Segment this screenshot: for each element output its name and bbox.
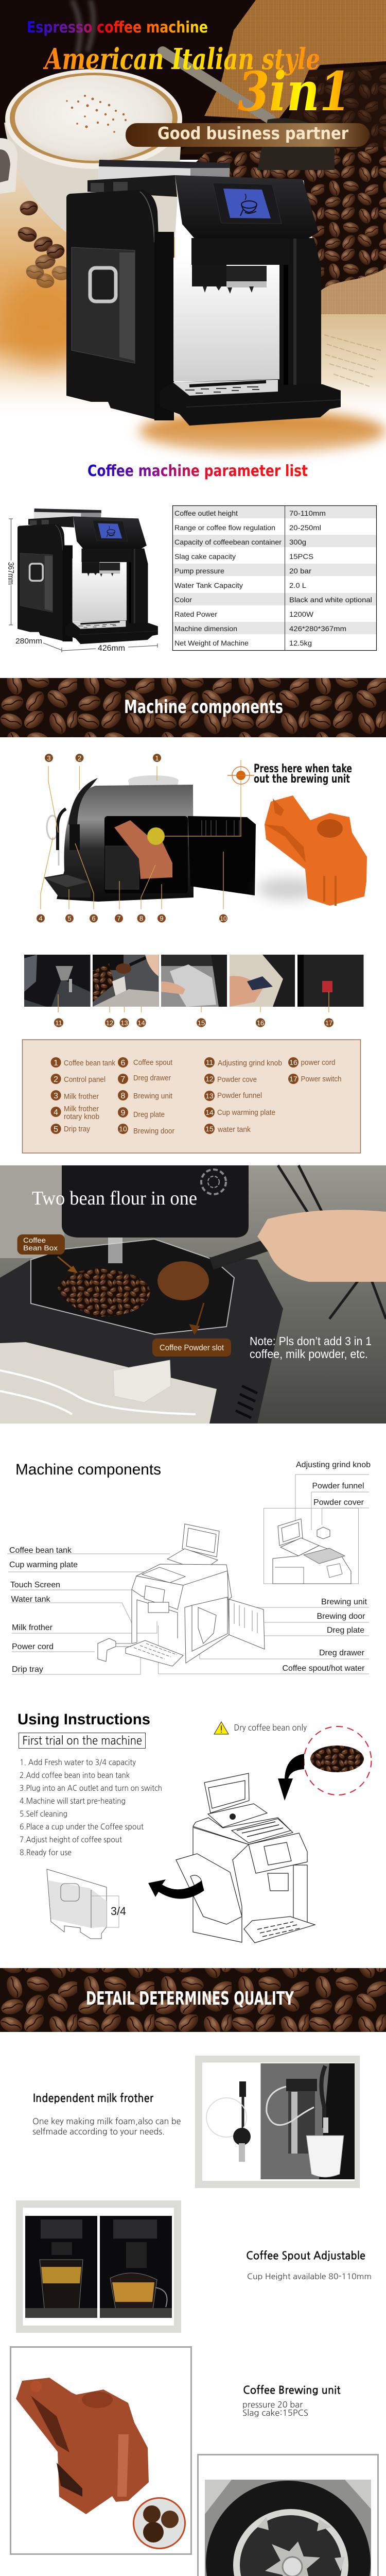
feature: independent milk frother: selfmade according to your needs. bbox=[32, 2128, 165, 2136]
note: press here bbox=[254, 762, 352, 786]
parameter table: Black and white optional bbox=[289, 596, 372, 604]
callout lines and labels: Water tank bbox=[11, 1595, 50, 1604]
legend column 4 bbox=[288, 1057, 342, 1084]
callout lines and labels: Powder cover bbox=[313, 1498, 364, 1507]
callout lines and labels: Dreg plate bbox=[327, 1626, 364, 1635]
callout lines and labels: Touch Screen bbox=[10, 1581, 60, 1589]
inset line drawing: powder funnel bbox=[264, 1509, 358, 1584]
component number badges: 14 bbox=[137, 1019, 145, 1027]
numbered leader lines bbox=[41, 766, 329, 1012]
callout lines and labels: Dreg drawer bbox=[319, 1649, 365, 1657]
legend column 3 bbox=[204, 1057, 282, 1134]
feature: coffee spout text bbox=[246, 2250, 372, 2281]
component number badges bbox=[37, 754, 334, 1027]
section: hero and parameter table bbox=[0, 0, 386, 653]
callout lines and labels: Drip tray bbox=[12, 1665, 43, 1674]
parameter table: Rated Power bbox=[174, 610, 217, 618]
legend column 2 bbox=[118, 1057, 174, 1136]
parameter table: 70-110mm bbox=[289, 509, 326, 517]
feature: independent milk frother: One key making milk foam,also can be bbox=[32, 2117, 181, 2126]
parameter table: Coffee outlet height bbox=[174, 509, 238, 517]
legend column 2: 7 bbox=[121, 1075, 126, 1084]
component number badges: 16 bbox=[257, 1019, 264, 1027]
parameter table bbox=[172, 505, 377, 651]
callout lines and labels: Milk frother bbox=[12, 1623, 53, 1632]
arrow: remove tank bbox=[148, 1879, 204, 1899]
instruction steps list: 6.Place a cup under the Coffee spout bbox=[20, 1823, 144, 1831]
feature: coffee brewing unit text: pressure 20 bar bbox=[242, 2401, 303, 2409]
instruction steps list: 4.Machine will start pre-heating bbox=[20, 1798, 126, 1805]
feature: independent milk frother bbox=[32, 2092, 181, 2136]
coffee machine bbox=[66, 160, 341, 426]
dimensions product image: 280mm bbox=[15, 637, 42, 646]
banner: detail determines quality bbox=[0, 1968, 386, 2032]
parameter table: 426*280*367mm bbox=[289, 624, 346, 633]
feature: coffee brewing unit text: Slag cake:15PCS bbox=[242, 2409, 308, 2417]
machine with brewing door open bbox=[44, 775, 256, 902]
callout lines and labels: Coffee bean tank bbox=[9, 1546, 72, 1555]
warning: dry coffee bean only bbox=[214, 1722, 307, 1734]
instruction steps list: 2.Add coffee bean into bean tank bbox=[20, 1772, 130, 1780]
arrow: powder slot bbox=[190, 1303, 204, 1333]
stainless warming plate bbox=[0, 1342, 217, 1423]
label: coffee powder slot bbox=[152, 1338, 231, 1357]
legend column 1: 1 bbox=[54, 1059, 58, 1067]
callout lines and labels: Powder funnel bbox=[312, 1482, 364, 1490]
label: coffee bean box bbox=[17, 1234, 65, 1255]
arrow: bean box bbox=[58, 1257, 76, 1272]
coffee beans heap bbox=[178, 147, 386, 291]
photo: water tank bbox=[161, 955, 227, 1007]
parameter table: 20 bar bbox=[289, 567, 311, 575]
parameter table: Color bbox=[174, 596, 192, 604]
dimensions product image bbox=[6, 509, 158, 653]
red dashed circle with beans bbox=[304, 1726, 372, 1795]
banner: machine components bbox=[0, 678, 386, 737]
legend column 2: 9 bbox=[121, 1109, 126, 1117]
heading: two bean flour in one: Two bean flour in one bbox=[32, 1188, 197, 1209]
beans on saucer bbox=[16, 199, 71, 290]
parameter table: Pump pressure bbox=[174, 567, 224, 575]
heading: machine components diagram: Machine components bbox=[15, 1461, 161, 1478]
banner: machine components: Machine components bbox=[124, 697, 283, 718]
banner: detail determines quality: DETAIL DETERMINES QUALITY bbox=[86, 1988, 294, 2009]
legend column 1: Drip tray bbox=[64, 1125, 90, 1133]
parameter table: Capacity of coffeebean container bbox=[174, 538, 282, 546]
component number badges: 13 bbox=[120, 1019, 128, 1027]
warning: dry coffee bean only: Dry coffee bean only bbox=[234, 1724, 307, 1732]
component number badges: 9 bbox=[160, 914, 164, 922]
parameter table: Machine dimension bbox=[174, 624, 237, 633]
component legend panel bbox=[23, 1040, 360, 1153]
legend column 3: water tank bbox=[217, 1125, 251, 1134]
component number badges: 4 bbox=[39, 914, 43, 922]
label: coffee bean box: Bean Box bbox=[23, 1244, 58, 1252]
parameter table: 300g bbox=[289, 538, 306, 546]
legend column 4: power cord bbox=[301, 1058, 336, 1067]
photo: professional grinder bbox=[198, 2454, 378, 2576]
main line drawing: machine exploded view bbox=[98, 1524, 265, 1666]
legend column 1: Milk frother bbox=[64, 1092, 99, 1101]
note: do not add 3 in 1: Note: Pls don’t add 3 in 1 bbox=[250, 1334, 372, 1348]
note: press here: out the brewing unit bbox=[254, 773, 350, 786]
feature: independent milk frother: Independent milk frother bbox=[33, 2092, 154, 2104]
photo: power switch bbox=[297, 955, 363, 1012]
pill: good business partner: Good business partner bbox=[157, 123, 349, 143]
photo panel: two bean flour in one bbox=[0, 1165, 386, 1423]
instruction steps list: 8.Ready for use bbox=[20, 1849, 72, 1857]
legend column 3: 13 bbox=[205, 1092, 214, 1100]
parameter table: Water Tank Capacity bbox=[174, 581, 243, 589]
component number badges: 7 bbox=[117, 914, 121, 922]
legend column 1 bbox=[51, 1057, 115, 1134]
heading: parameter list: Coffee machine parameter list bbox=[87, 462, 308, 480]
jute sack bbox=[204, 0, 386, 120]
legend column 2: Coffee spout bbox=[133, 1058, 173, 1067]
legend column 3: Adjusting grind knob bbox=[218, 1059, 282, 1067]
callout lines and labels: Brewing door bbox=[317, 1612, 365, 1621]
component number badges: 8 bbox=[139, 914, 143, 922]
instruction steps list: 3.Plug into an AC outlet and turn on switch bbox=[20, 1785, 162, 1792]
coffee cup bbox=[0, 69, 182, 237]
measuring scoop and hand bbox=[212, 1235, 295, 1264]
legend column 1: 2 bbox=[54, 1075, 58, 1084]
section: machine components bbox=[0, 678, 386, 1154]
legend column 3: Powder cove bbox=[217, 1075, 257, 1084]
note: do not add 3 in 1 bbox=[250, 1334, 372, 1361]
photo: coffee spout adjustable bbox=[16, 2200, 181, 2333]
dimensions product image: 426mm bbox=[98, 644, 125, 653]
component number badges: 17 bbox=[325, 1019, 332, 1027]
legend column 4: 16 bbox=[289, 1058, 297, 1066]
box: first trial: First trial on the machine bbox=[23, 1735, 142, 1747]
feature: coffee spout text: Cup Height available 80-110mm bbox=[247, 2273, 372, 2281]
brewing unit release marker bbox=[147, 760, 254, 845]
legend column 1: 3 bbox=[54, 1092, 58, 1100]
feature: coffee brewing unit text: Coffee Brewing unit bbox=[243, 2385, 341, 2396]
parameter table: Slag cake capacity bbox=[174, 552, 236, 561]
feature: coffee spout text: Coffee Spout Adjustable bbox=[246, 2250, 365, 2262]
legend column 2: Dreg plate bbox=[133, 1110, 165, 1119]
arrow: add beans bbox=[278, 1754, 304, 1801]
component number badges: 5 bbox=[67, 914, 72, 922]
parameter table: Range or coffee flow regulation bbox=[174, 523, 275, 532]
parameter table: 2.0 L bbox=[289, 581, 306, 589]
hero banner bbox=[0, 0, 386, 503]
parameter table: 1200W bbox=[289, 610, 314, 618]
instruction steps list bbox=[20, 1759, 162, 1857]
legend column 2: Dreg drawer bbox=[133, 1074, 171, 1082]
legend column 1: Coffee bean tank bbox=[64, 1059, 115, 1067]
legend column 3: 11 bbox=[206, 1058, 213, 1066]
instruction steps list: 7.Adjust height of coffee spout bbox=[20, 1836, 122, 1844]
photo: coffee brewing unit bbox=[10, 2347, 191, 2554]
callout lines and labels: Cup warming plate bbox=[9, 1561, 78, 1569]
photo: milk frother bbox=[195, 2056, 360, 2188]
metal scoop bbox=[163, 52, 271, 120]
legend column 4: 17 bbox=[289, 1075, 297, 1083]
legend column 2: Brewing unit bbox=[133, 1092, 173, 1100]
label: coffee bean box: Coffee bbox=[23, 1236, 46, 1244]
legend column 1: Milk frother bbox=[64, 1105, 99, 1113]
feature: coffee brewing unit text bbox=[242, 2385, 341, 2417]
legend column 4: Power switch bbox=[301, 1075, 342, 1083]
component number badges: 6 bbox=[92, 914, 96, 922]
callout lines and labels: Brewing unit bbox=[321, 1598, 367, 1606]
legend column 2: 10 bbox=[119, 1125, 127, 1133]
steam bbox=[72, 0, 93, 54]
coffee beans in tank bbox=[58, 1268, 150, 1317]
legend column 2: 8 bbox=[121, 1092, 126, 1100]
box: first trial bbox=[19, 1733, 145, 1749]
callout lines and labels bbox=[7, 1461, 371, 1674]
legend column 3: 14 bbox=[205, 1108, 214, 1116]
legend column 3: Powder funnel bbox=[217, 1091, 262, 1100]
title: 3in1: 3in1 bbox=[238, 60, 351, 123]
orange brewing unit bbox=[257, 795, 367, 906]
component number badges: 15 bbox=[198, 1019, 205, 1027]
instruction steps list: 1. Add Fresh water to 3/4 capacity bbox=[20, 1759, 136, 1767]
component number badges: 2 bbox=[78, 754, 81, 762]
dimensions product image: 367mm bbox=[6, 562, 15, 585]
photo: adjusting grind knob bbox=[24, 955, 91, 1012]
line drawing: machine open tank bbox=[176, 1773, 315, 1943]
photo: power cord bbox=[230, 955, 295, 1007]
legend column 3: 12 bbox=[205, 1075, 214, 1083]
instruction steps list: 5.Self cleaning bbox=[20, 1810, 67, 1818]
component number badges: 10 bbox=[220, 915, 227, 922]
legend column 1: 5 bbox=[54, 1125, 58, 1134]
legend column 1: rotary knob bbox=[64, 1112, 99, 1121]
callout lines and labels: Adjusting grind knob bbox=[296, 1461, 371, 1469]
callout lines and labels: Power cord bbox=[12, 1642, 54, 1651]
title: espresso coffee machine: Espresso coffee machine bbox=[27, 19, 208, 37]
legend column 3: Cup warming plate bbox=[217, 1108, 275, 1117]
section: detail quality part one bbox=[0, 1968, 386, 2576]
line drawing: water tank 3/4: 3/4 bbox=[111, 1905, 126, 1918]
callout lines and labels: Coffee spout/hot water bbox=[282, 1664, 365, 1673]
line drawing: water tank 3/4 bbox=[47, 1869, 126, 1939]
parameter table: 15PCS bbox=[289, 552, 313, 561]
note: do not add 3 in 1: coffee, milk powder, etc. bbox=[250, 1347, 368, 1361]
component number badges: 3 bbox=[47, 754, 51, 762]
legend column 3: 15 bbox=[205, 1125, 214, 1133]
section: bean photo and diagrams bbox=[0, 1164, 386, 1943]
photo: powder funnel and scoop bbox=[93, 955, 159, 1007]
label: coffee powder slot: Coffee Powder slot bbox=[160, 1344, 224, 1352]
heading: using instructions: Using Instructions bbox=[17, 1711, 150, 1728]
parameter table: 12.5kg bbox=[289, 639, 312, 647]
component number badges: 12 bbox=[106, 1019, 113, 1027]
component number badges: 11 bbox=[55, 1019, 62, 1027]
legend column 1: Control panel bbox=[64, 1075, 106, 1084]
component number badges: 1 bbox=[155, 754, 159, 762]
parameter table: 20-250ml bbox=[289, 523, 321, 532]
parameter table: Net Weight of Machine bbox=[174, 639, 249, 647]
legend column 2: 6 bbox=[121, 1059, 126, 1067]
legend column 1: 4 bbox=[54, 1108, 58, 1117]
legend column 2: Brewing door bbox=[133, 1127, 174, 1136]
